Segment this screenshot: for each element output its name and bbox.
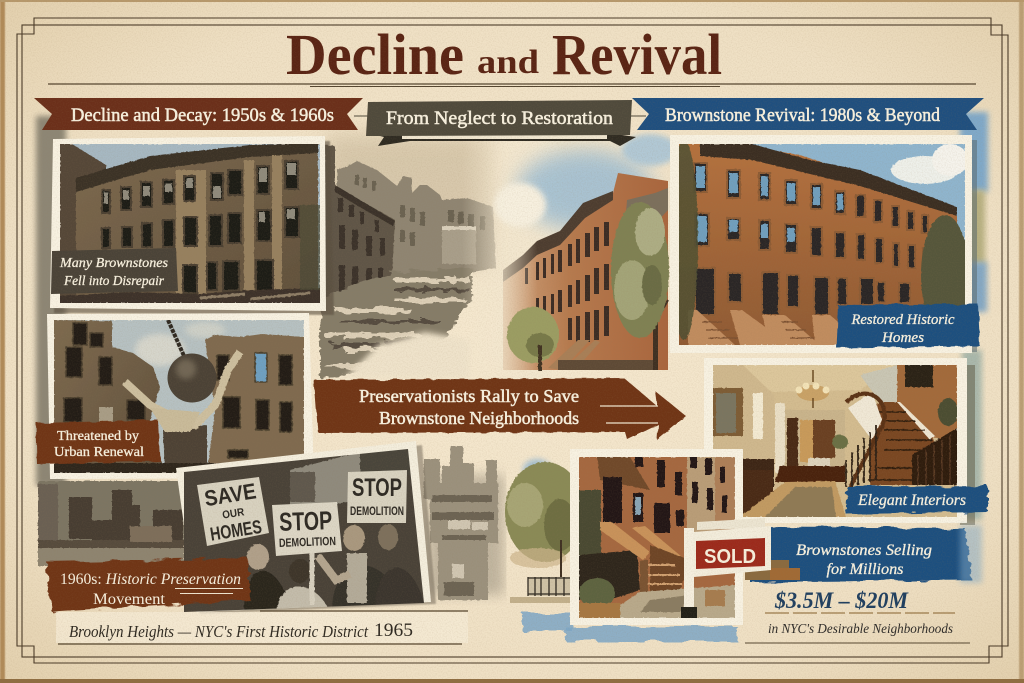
title: and — [477, 44, 539, 81]
colour brick rowhouses — [503, 173, 668, 370]
green tree lower centre — [505, 459, 585, 580]
photo: sold brownstone — [570, 449, 743, 625]
footer caption: Brooklyn Heights: Brooklyn Heights — NYC's First Historic District — [69, 622, 368, 641]
cream road and fade — [345, 130, 555, 380]
sold sign: SOLD — [704, 546, 756, 568]
sold sign — [681, 518, 771, 618]
ribbon: from neglect to restoration — [354, 100, 646, 146]
photo: threatened by urban renewal — [36, 313, 314, 479]
banner shape: 1960s historic preservation movement — [46, 558, 250, 612]
small sepia skyline — [38, 481, 184, 566]
caption: restored historic homes — [851, 312, 955, 346]
arrow: preservationists rally: Brownstone Neighborhoods — [379, 408, 579, 428]
sepia skyline lower centre — [424, 446, 504, 600]
sign: stop demolition right — [347, 470, 407, 523]
sky and clouds right — [494, 134, 678, 230]
caption: brownstones selling for millions: for Millions — [826, 561, 904, 578]
sign: save our homes — [197, 477, 269, 546]
arrow: preservationists rally — [314, 378, 686, 440]
caption shape: brownstones selling for millions — [750, 527, 972, 582]
price range: $3.5M – $20M — [774, 588, 909, 613]
caption: brownstones selling for millions — [796, 525, 982, 583]
caption: many brownstones — [51, 248, 178, 294]
footer caption: Brooklyn Heights — [56, 611, 468, 644]
caption shape: threatened — [36, 420, 160, 464]
caption: 1960s historic preservation movement: 1960s: Historic Preservation — [60, 571, 241, 588]
title rule — [48, 84, 976, 86]
photo: many brownstones in disrepair — [50, 136, 334, 315]
distant ruined buildings — [337, 161, 496, 285]
sign: stop demolition right: STOP — [352, 474, 402, 502]
arrow: preservationists rally: Preservationists Rally to Save — [359, 386, 579, 406]
left and right colour washes — [36, 112, 988, 641]
ribbon: decline and decay — [34, 98, 363, 130]
photo: elegant interiors — [704, 358, 975, 525]
near ruined row — [325, 145, 395, 303]
neighbourhoods caption: in NYC's Desirable Neighborhoods — [768, 622, 954, 637]
sign: stop demolition centre: STOP — [279, 505, 333, 537]
caption: 1960s historic preservation movement: Movement — [93, 591, 166, 608]
ribbon: brownstone revival — [632, 98, 984, 130]
photo: restored historic homes — [670, 135, 977, 353]
caption: many brownstones: Fell into Disrepair — [63, 274, 165, 289]
caption shape: restored historic homes — [836, 304, 980, 348]
sign: save our homes: HOMES — [209, 517, 263, 546]
ribbon: brownstone revival: Brownstone Revival: 1980s & Beyond — [665, 106, 941, 126]
sepia tint behind ruins — [326, 135, 496, 265]
ribbon: from neglect to restoration: From Neglect to Restoration — [386, 109, 613, 129]
caption: many brownstones: Many Brownstones — [59, 256, 169, 271]
caption: brownstones selling for millions: Brownstones Selling — [796, 542, 932, 559]
caption text: threatened by urban renewal: Urban Renewal — [54, 444, 144, 459]
sign: save our homes: OUR — [222, 506, 245, 522]
small green tree — [507, 307, 559, 371]
sign: stop demolition right: DEMOLITION — [350, 504, 404, 518]
caption: restored historic homes: Homes — [881, 330, 924, 346]
planter strip — [745, 560, 800, 580]
rubble-strewn street — [320, 268, 472, 378]
caption text: threatened by urban renewal — [54, 428, 144, 459]
caption: elegant interiors: Elegant Interiors — [857, 492, 966, 509]
protest photo — [176, 441, 436, 615]
sign: stop demolition centre: DEMOLITION — [279, 534, 336, 550]
caption: restored historic homes: Restored Historic — [851, 312, 955, 328]
caption shape: elegant interiors — [846, 486, 988, 514]
iron fence and pavement — [510, 577, 572, 603]
title: Decline — [286, 22, 464, 87]
sign: stop demolition centre — [272, 502, 342, 556]
footer caption: Brooklyn Heights: 1965 — [374, 620, 413, 641]
caption: 1960s historic preservation movement — [60, 571, 243, 608]
title: Revival — [552, 22, 722, 87]
caption text: threatened by urban renewal: Threatened by — [57, 428, 139, 443]
title — [286, 22, 722, 87]
centre scene: ruined street fading into restored block — [320, 130, 678, 603]
ribbon: decline and decay: Decline and Decay: 1950s & 1960s — [71, 106, 334, 126]
green tree right of street — [611, 202, 669, 338]
sign: save our homes: SAVE — [203, 478, 258, 511]
